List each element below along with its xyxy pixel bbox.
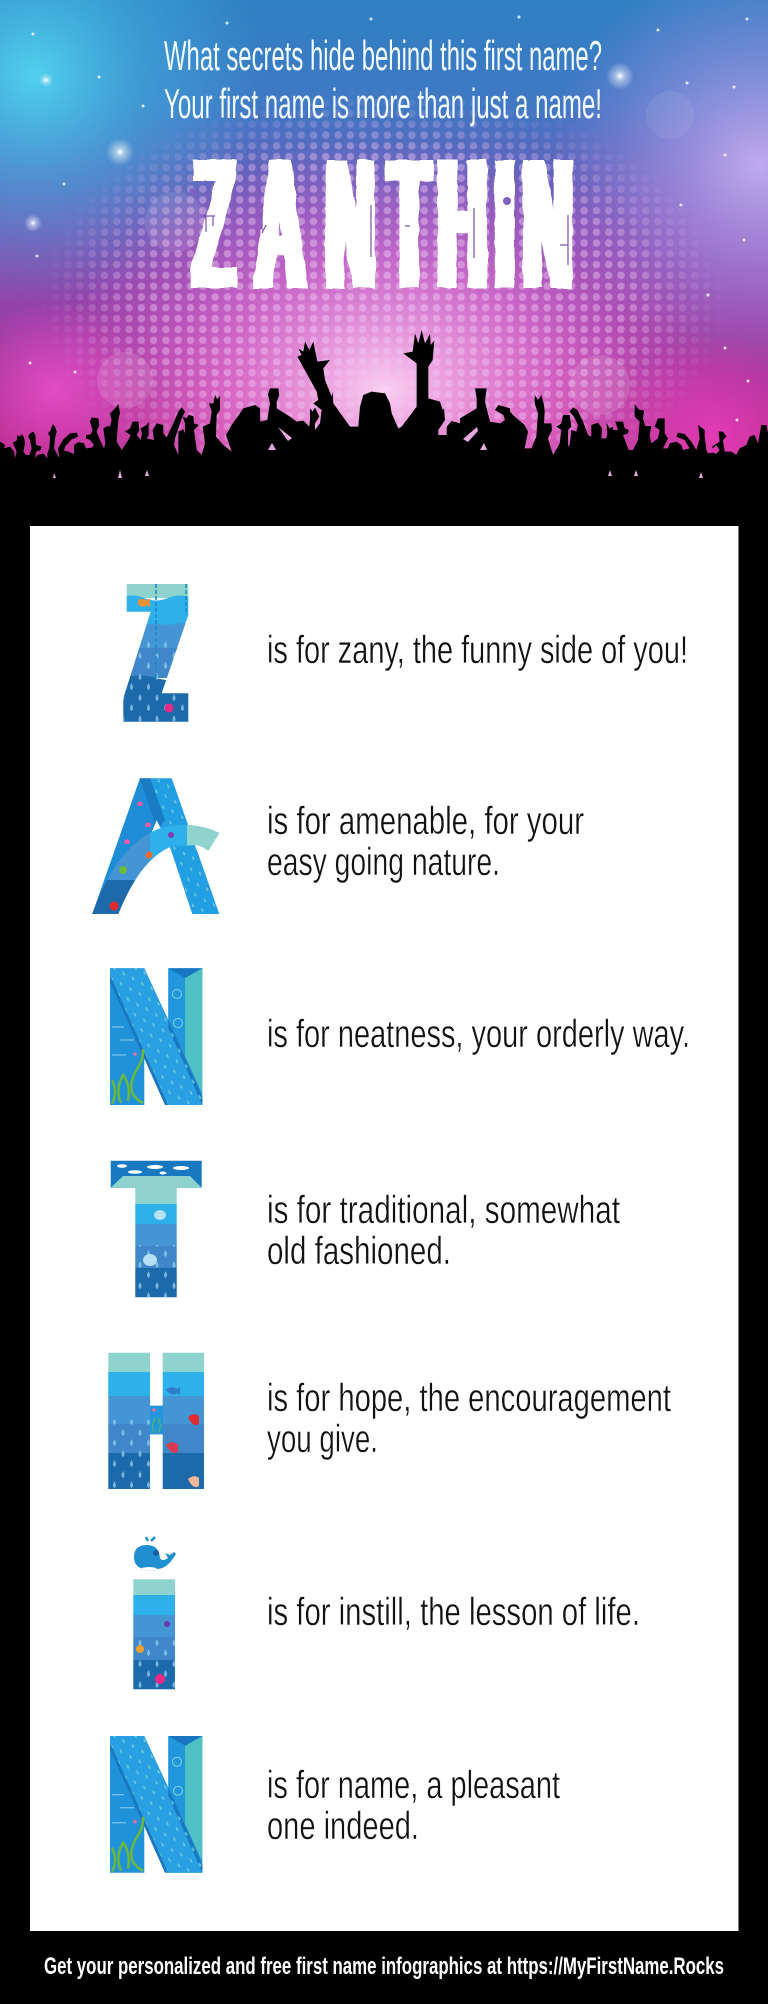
text: T line: is for traditional, somewhat xyxy=(267,1189,620,1232)
icon: letter A xyxy=(92,778,220,914)
icon: whale on letter I xyxy=(134,1537,176,1571)
icon: letter H xyxy=(105,1352,207,1490)
text: second N line: one indeed. xyxy=(267,1805,419,1848)
icon: second letter N xyxy=(110,1736,202,1873)
title: first name: ZANTHIN xyxy=(194,119,572,328)
text: A line: is for amenable, for your xyxy=(267,800,584,843)
text: A line xyxy=(267,800,584,884)
text: H line: you give. xyxy=(267,1418,378,1461)
panel: white content xyxy=(30,526,738,1931)
text: second N line xyxy=(267,1764,560,1848)
icon: letter I xyxy=(133,1579,175,1689)
text: I line: is for instill, the lesson of life. xyxy=(267,1591,640,1634)
text: A line: easy going nature. xyxy=(267,841,500,884)
icon: letter T xyxy=(111,1161,202,1298)
icon: letter N xyxy=(110,968,202,1105)
text: second N line: is for name, a pleasant xyxy=(267,1764,560,1807)
icon: letter Z xyxy=(120,584,192,722)
text: H line xyxy=(267,1377,671,1461)
text: T line: old fashioned. xyxy=(267,1230,451,1273)
crowd silhouette xyxy=(0,330,768,526)
text: T line xyxy=(267,1189,620,1273)
panel: header concert background xyxy=(0,0,768,458)
